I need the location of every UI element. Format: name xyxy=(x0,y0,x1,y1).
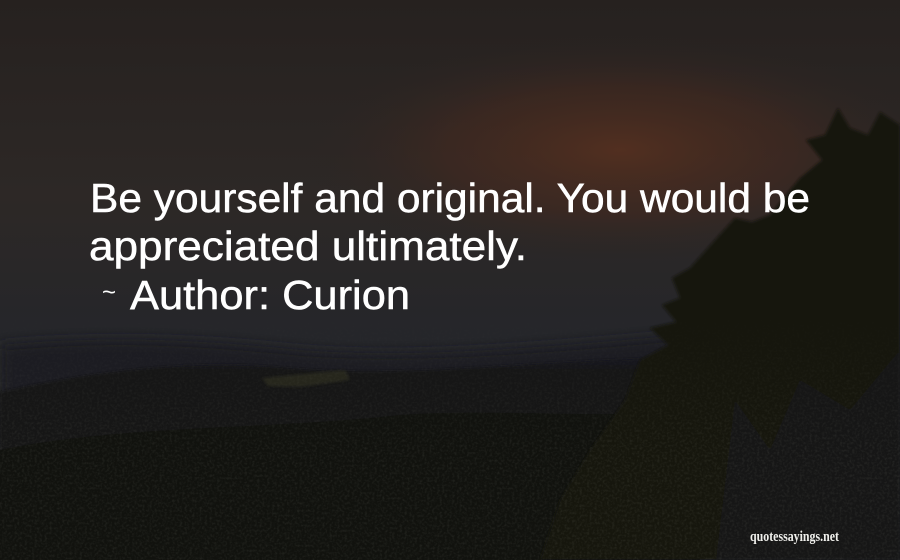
author attribution xyxy=(102,272,410,318)
background: distant hills xyxy=(0,335,680,560)
quote text xyxy=(89,175,810,269)
quote line 1: Be yourself and original. You would be xyxy=(90,175,810,221)
tilde mark: ~ xyxy=(102,279,116,306)
background: forested valley xyxy=(0,358,700,560)
watermark: quotessayings.net xyxy=(750,529,839,545)
author name: Author: Curion xyxy=(130,272,410,318)
pale meadow clearing xyxy=(262,370,350,387)
quote line 2: appreciated ultimately. xyxy=(89,223,527,269)
background: conifer trees on the right xyxy=(540,108,900,560)
background: texture grain xyxy=(0,385,900,560)
